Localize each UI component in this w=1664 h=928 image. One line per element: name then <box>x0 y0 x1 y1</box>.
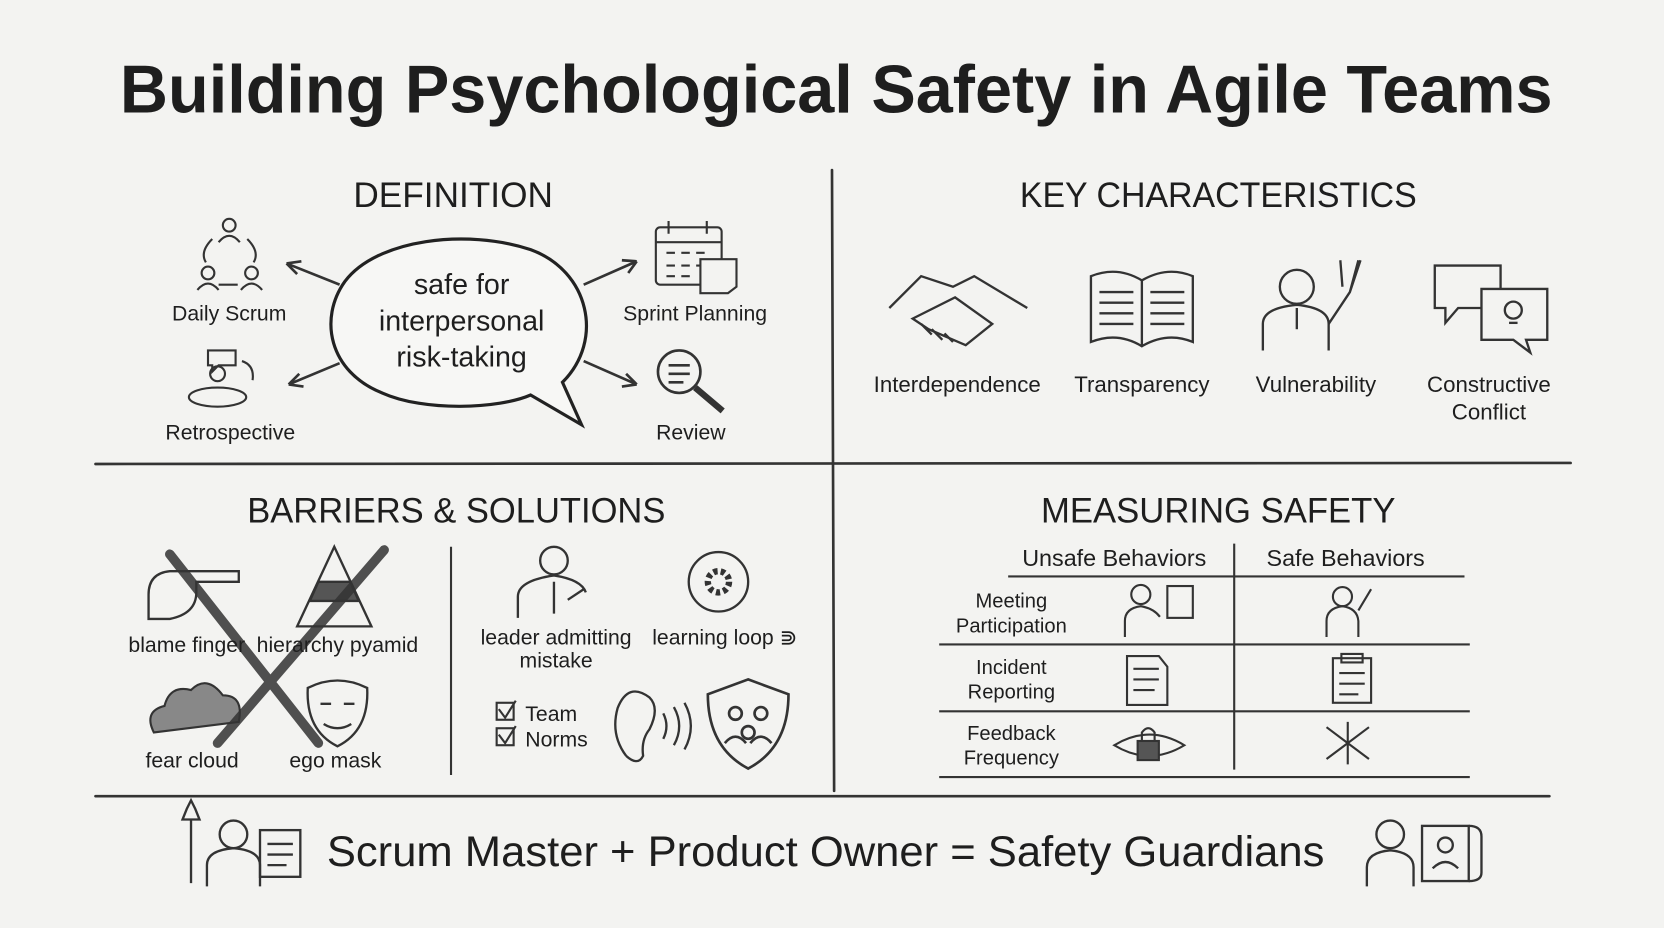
icon: fear cloud <box>150 683 240 732</box>
panel: barriers & solutions: learning loop ⋑ <box>652 626 797 649</box>
icon: product owner <box>1367 821 1481 886</box>
panel: measuring safety: Frequency <box>964 747 1060 769</box>
panel: barriers & solutions: ego mask <box>289 750 382 773</box>
checklist: team norms: Norms <box>525 728 588 751</box>
panel: definition: Sprint Planning <box>623 303 767 326</box>
icon: ego mask <box>308 680 367 746</box>
panel: barriers & solutions: leader admitting <box>481 626 632 649</box>
panel: key characteristics <box>874 176 1551 424</box>
icon: magnifier <box>658 350 723 411</box>
big X <box>170 550 384 743</box>
speech bubble: risk-taking <box>396 341 527 373</box>
panel: key characteristics: Constructive <box>1427 372 1551 397</box>
icon: calendar <box>656 221 736 293</box>
arrows <box>287 260 637 387</box>
panel: measuring safety: Meeting <box>975 590 1047 612</box>
panel: key characteristics: Transparency <box>1074 372 1210 397</box>
panel: measuring safety: Participation <box>956 616 1067 638</box>
heading: KEY CHARACTERISTICS <box>1020 176 1417 215</box>
panel: definition: Review <box>656 422 726 445</box>
icon: learning loop <box>689 552 748 612</box>
panel: barriers & solutions: fear cloud <box>145 750 239 773</box>
icon: handshake <box>889 276 1027 345</box>
icon: leader <box>518 547 586 618</box>
icon: vulnerability <box>1263 260 1360 350</box>
panel: barriers & solutions <box>128 491 797 775</box>
checklist: team norms: Team <box>525 703 577 726</box>
panel: measuring safety: Safe Behaviors <box>1267 545 1425 571</box>
icon: ear <box>615 692 691 761</box>
panel: measuring safety <box>939 491 1470 777</box>
icon: scrum master <box>183 800 300 886</box>
icon: daily scrum <box>197 219 262 290</box>
icon: pyramid <box>297 547 371 626</box>
title: Building Psychological Safety in Agile Teams <box>120 53 1553 128</box>
speech bubble <box>331 239 586 425</box>
speech bubble: interpersonal <box>379 305 544 337</box>
icon: blame finger <box>149 571 239 619</box>
icon: retrospective <box>189 350 253 407</box>
panel: key characteristics: Conflict <box>1452 399 1527 424</box>
panel: barriers & solutions: hierarchy pyamid <box>257 634 418 657</box>
footer banner <box>183 800 1481 886</box>
heading: MEASURING SAFETY <box>1041 491 1396 530</box>
icons: table <box>1114 585 1371 764</box>
panel: key characteristics: Vulnerability <box>1256 372 1377 397</box>
speech bubble: safe for <box>414 269 510 301</box>
panel: definition <box>165 176 767 445</box>
panel: measuring safety: Unsafe Behaviors <box>1022 545 1206 571</box>
icon: conflict bubbles <box>1435 266 1547 353</box>
icon: shield <box>708 679 788 769</box>
panel: barriers & solutions: mistake <box>520 650 593 673</box>
heading: BARRIERS & SOLUTIONS <box>247 491 665 530</box>
panel: definition: Daily Scrum <box>172 303 286 326</box>
panel: measuring safety: Incident <box>976 657 1047 679</box>
panel: measuring safety: Feedback <box>967 723 1057 745</box>
panel: measuring safety: Reporting <box>968 682 1055 704</box>
heading: definition: DEFINITION <box>353 176 553 215</box>
panel: definition: Retrospective <box>165 422 295 445</box>
icon: book <box>1091 272 1193 346</box>
checklist: team norms <box>497 701 588 751</box>
footer banner: Scrum Master + Product Owner = Safety Guardians <box>327 828 1324 875</box>
panel: barriers & solutions: blame finger <box>128 634 245 657</box>
panel: key characteristics: Interdependence <box>874 372 1041 397</box>
